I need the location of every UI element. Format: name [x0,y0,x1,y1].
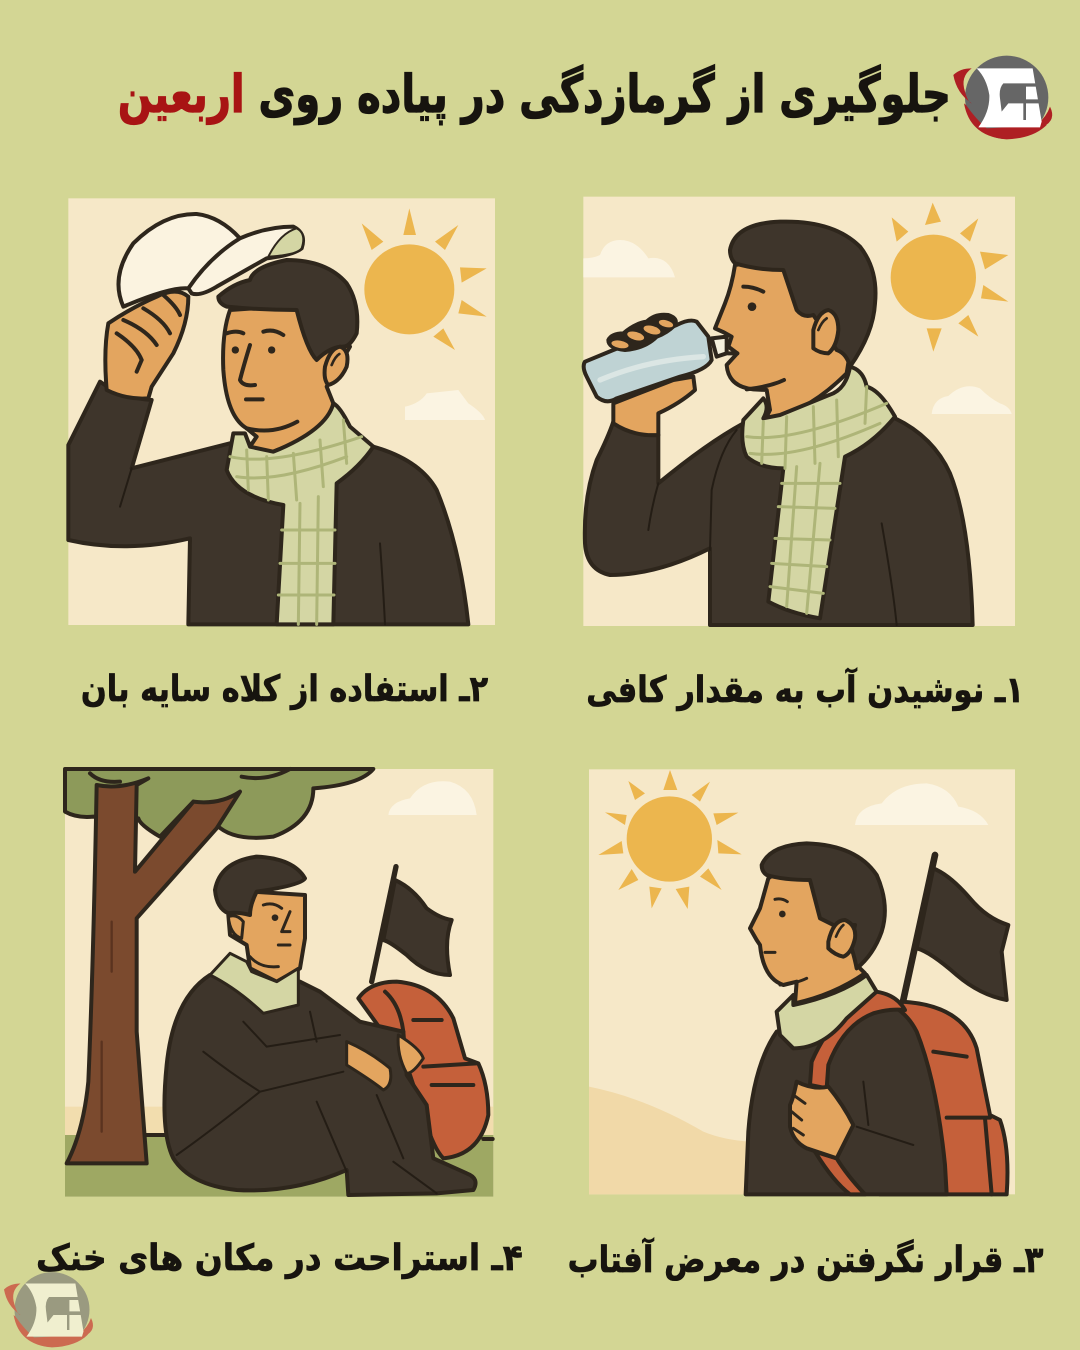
backpack [358,982,488,1158]
icon: sun [891,203,1008,352]
face and neck [223,303,350,452]
fingers [608,315,676,350]
title: جلوگیری از گرمازدگی در پیاده روی اربعین [118,65,951,125]
sand strip [65,1107,493,1137]
hair [215,857,305,915]
scarf [227,403,373,624]
hair [218,260,357,360]
caption 4: ۴ـ استراحت در مکان های خنک [36,1238,523,1279]
ear [325,347,347,385]
flag [372,867,396,982]
cloud [855,783,988,825]
hair [762,843,885,968]
trunk [67,778,240,1163]
scarf [210,953,298,1013]
scarf [742,367,895,618]
icon: sun [362,208,487,350]
cloud [388,781,477,815]
hand [790,1082,853,1158]
panel: drinking water [583,197,1015,626]
face and neck [228,892,305,982]
face and neck [750,865,873,1003]
scarf [777,975,877,1048]
strap [810,992,905,1088]
logo bottom left [4,1272,93,1348]
flag [903,855,935,1000]
cloud right [932,386,1012,414]
caption 3: ۳ـ قرار نگرفتن در معرض آفتاب [567,1240,1043,1281]
cloud left [583,240,675,277]
jacket [746,998,947,1194]
cap [118,214,240,307]
foliage [65,769,373,838]
cloud [405,390,485,420]
ground [65,1135,493,1197]
hair [730,222,876,367]
ear [828,920,855,957]
face and neck [715,257,860,420]
jacket [68,382,468,624]
panel: avoid sun exposure [589,769,1015,1194]
hand [105,292,188,399]
panel: rest in cool places [65,769,493,1197]
body [164,975,476,1195]
caption 2: ۲ـ استفاده از کلاه سایه بان [81,669,488,710]
sand dune [589,1087,750,1194]
ear [813,310,838,353]
forearm and hand [613,377,695,435]
panel: sun hat [68,198,495,625]
caption 1: ۱ـ نوشیدن آب به مقدار کافی [586,670,1024,711]
hands [347,1042,391,1090]
icon: sun [598,770,742,909]
ear [228,916,243,938]
logo top right [953,56,1052,139]
backpack [880,1002,1007,1194]
bottle [712,337,727,357]
jacket [585,418,973,625]
